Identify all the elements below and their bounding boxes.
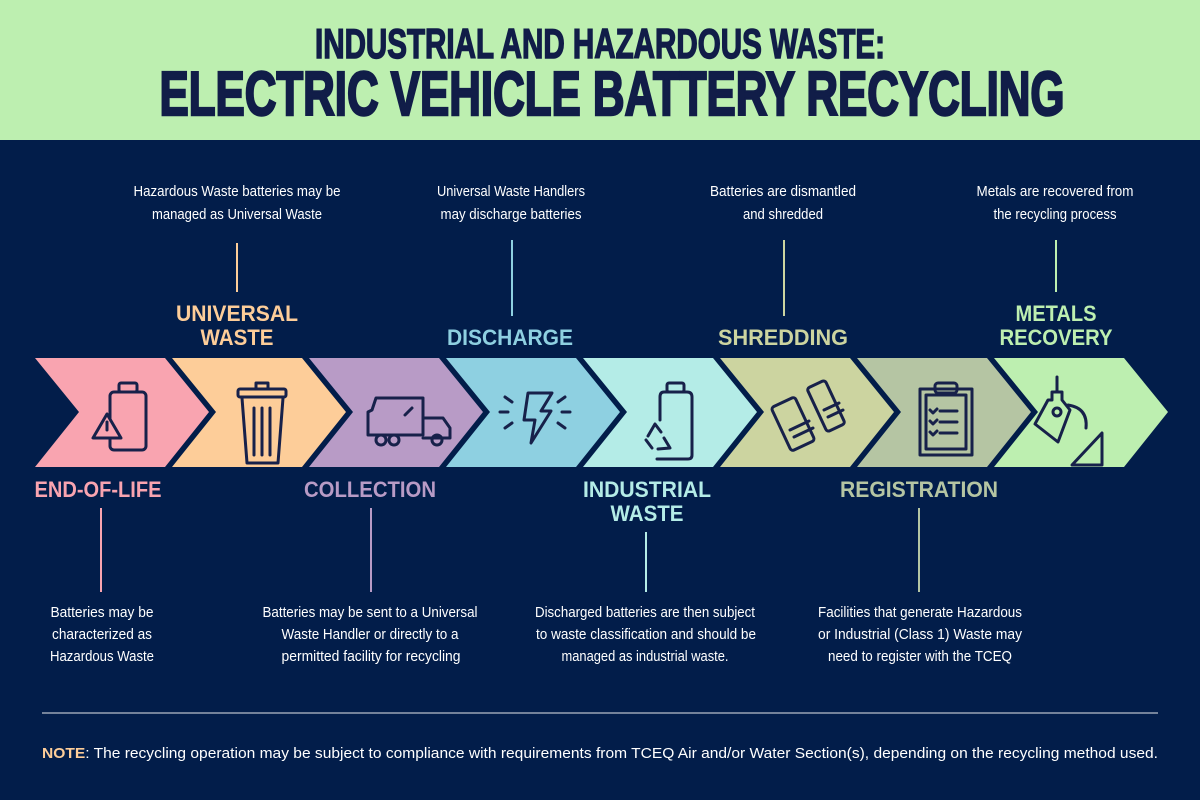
- step headings: WASTE: [610, 501, 684, 526]
- text: industrial waste: Discharged batteries are then subject: [535, 604, 756, 621]
- heading: end-of-life: END-OF-LIFE: [34, 477, 162, 502]
- text: shredding: Batteries are dismantled: [710, 183, 856, 200]
- title line 1: INDUSTRIAL AND HAZARDOUS WASTE:: [315, 20, 885, 67]
- heading: metals recovery: METALS: [1016, 301, 1096, 326]
- heading: universal waste: UNIVERSAL: [176, 301, 298, 326]
- chevron: industrial waste: [583, 358, 757, 467]
- icon: batteries shredding: [771, 380, 845, 451]
- chevron: shredding: [720, 358, 894, 467]
- note: NOTE: The recycling operation may be subject to compliance with requirements from TCEQ Air and/or Water Section(s), depending on the recycling method used.: [42, 745, 1158, 762]
- descriptions: permitted facility for recycling: [282, 648, 460, 665]
- text: registration: Facilities that generate Hazardous: [818, 604, 1022, 621]
- descriptions: managed as industrial waste.: [562, 648, 728, 665]
- step headings: WASTE: [200, 325, 274, 350]
- icon: truck: [368, 398, 450, 445]
- connector lines: [101, 240, 1056, 592]
- icon: battery recycle: [646, 383, 692, 459]
- icon: trash can: [238, 383, 286, 463]
- text: end-of-life: Batteries may be: [50, 604, 154, 621]
- text: discharge: Universal Waste Handlers: [437, 183, 585, 200]
- descriptions: or Industrial (Class 1) Waste may: [818, 626, 1022, 643]
- icon: clipboard checklist: [920, 383, 972, 455]
- descriptions: [50, 183, 1134, 665]
- descriptions: Waste Handler or directly to a: [282, 626, 459, 643]
- heading: shredding: SHREDDING: [718, 325, 848, 350]
- header band: [0, 0, 1200, 140]
- text: metals recovery: Metals are recovered from: [976, 183, 1134, 200]
- text: universal waste: Hazardous Waste batteries may be: [134, 183, 340, 200]
- descriptions: the recycling process: [994, 206, 1116, 223]
- chevron: universal waste: [172, 358, 346, 467]
- descriptions: Hazardous Waste: [50, 648, 154, 665]
- icon: battery warning: [93, 383, 146, 450]
- icon: lightning: [500, 393, 570, 443]
- descriptions: may discharge batteries: [440, 206, 582, 223]
- icon: metal ladle: [1035, 377, 1102, 465]
- chevron: collection: [309, 358, 483, 467]
- icons: [93, 377, 1102, 465]
- heading: industrial waste: INDUSTRIAL: [583, 477, 711, 502]
- text: collection: Batteries may be sent to a Universal: [262, 604, 478, 621]
- step headings: [34, 301, 1113, 526]
- chevron: discharge: [446, 358, 620, 467]
- chevron: end-of-life: [35, 358, 209, 467]
- descriptions: managed as Universal Waste: [152, 206, 322, 223]
- step headings: RECOVERY: [1000, 325, 1113, 350]
- heading: discharge: DISCHARGE: [447, 325, 573, 350]
- descriptions: and shredded: [743, 206, 823, 223]
- descriptions: characterized as: [52, 626, 152, 643]
- chevron: registration: [857, 358, 1031, 467]
- process chevrons: [35, 358, 1168, 467]
- descriptions: need to register with the TCEQ: [828, 648, 1012, 665]
- heading: collection: COLLECTION: [304, 477, 436, 502]
- heading: registration: REGISTRATION: [840, 477, 998, 502]
- descriptions: to waste classification and should be: [536, 626, 756, 643]
- chevron: metals recovery: [994, 358, 1168, 467]
